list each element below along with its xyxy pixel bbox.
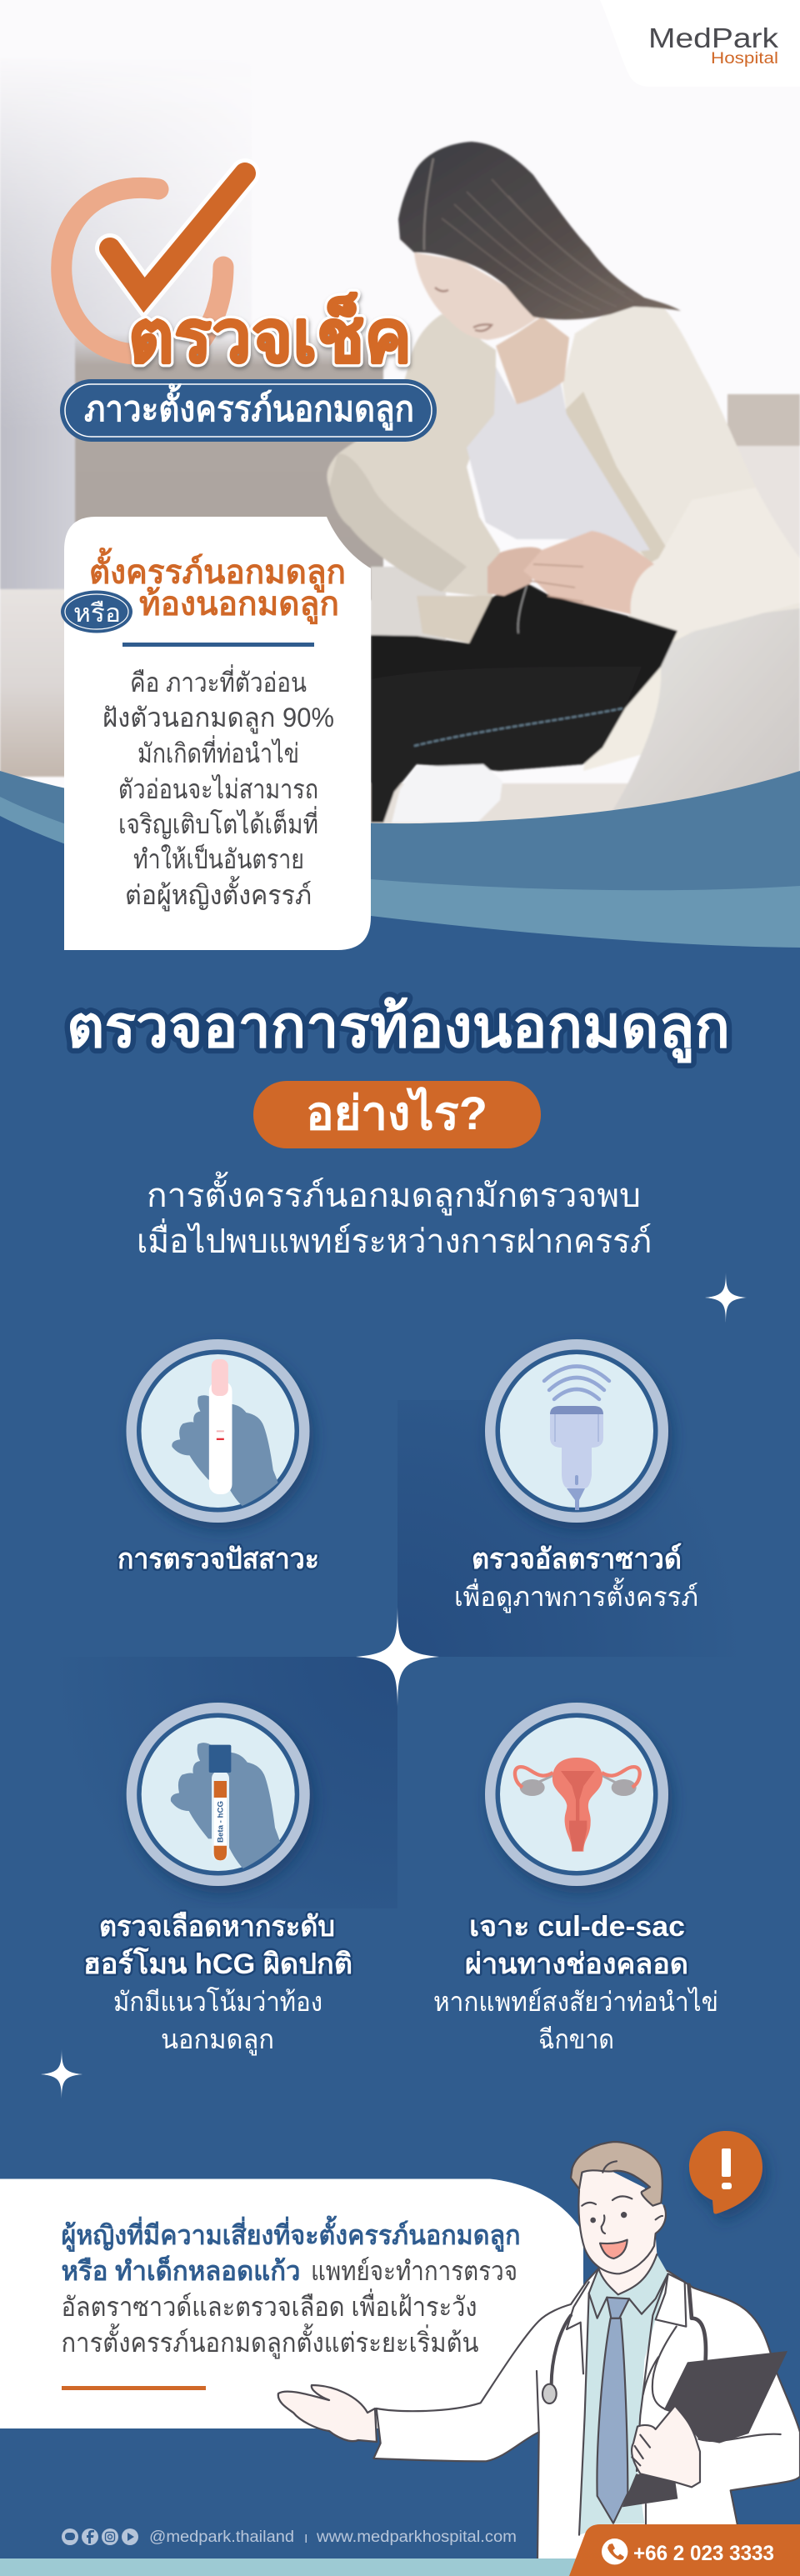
- label: [83, 1911, 352, 1980]
- risk note body: แพทย์จะทำการตรวจ: [311, 2256, 518, 2286]
- card heading line 2: ท้องนอกมดลูก: [139, 586, 339, 624]
- phone number: +66 2 023 3333: [633, 2542, 774, 2565]
- title: check: ตรวจเช็ค: [128, 292, 412, 378]
- orange rule: [62, 2386, 206, 2390]
- step: culdocentesis: [433, 1703, 718, 2054]
- risk note bold text 2: หรือ ทำเด็กหลอดแก้ว: [62, 2254, 300, 2286]
- icon: pregnancy test: [127, 1339, 310, 1523]
- wave: dark blue section background: [0, 816, 800, 2576]
- phone tab: [569, 2524, 800, 2576]
- risk note body: [62, 2256, 518, 2359]
- risk note bold text: ผู้หญิงที่มีความเสี่ยงที่จะตั้งครรภ์นอกมดลูก: [62, 2215, 520, 2253]
- sparkle top right: [705, 1273, 747, 1323]
- step: ultrasound: [454, 1339, 698, 1613]
- illustration: doctor: [278, 2142, 800, 2560]
- description: นอกมดลูก: [161, 2024, 274, 2056]
- description: เพื่อดูภาพการตั้งครรภ์: [454, 1578, 698, 1613]
- icon: check mark in ring: [62, 173, 245, 354]
- step: urine test: [118, 1339, 319, 1575]
- label: ผ่านทางช่องคลอด: [465, 1948, 688, 1980]
- intro text: การตั้งครรภ์นอกมดลูกมักตรวจพบ: [147, 1171, 641, 1215]
- card body text: ทำให้เป็นอันตราย: [133, 843, 304, 874]
- wave: light blue band: [0, 797, 800, 1083]
- description: ฉีกขาด: [538, 2024, 614, 2054]
- card body text: มักเกิดที่ท่อนำไข่: [138, 735, 299, 768]
- step: blood test: [83, 1703, 352, 2056]
- description: [433, 1987, 718, 2054]
- footer: handle: @medpark.thailand: [149, 2528, 294, 2546]
- label: เจาะ cul-de-sac: [469, 1911, 685, 1943]
- intro text: [137, 1171, 652, 1260]
- icon: blood tube: [127, 1703, 310, 1886]
- icon: alert bubble: [689, 2131, 762, 2213]
- wave: medium blue band: [0, 771, 800, 1083]
- risk note body: การตั้งครรภ์นอกมดลูกตั้งแต่ระยะเริ่มต้น: [62, 2323, 479, 2359]
- panel: risk note: [0, 2178, 583, 2428]
- title: check: ตรวจเช็ค: [128, 292, 412, 378]
- panel: definition card: [61, 517, 371, 950]
- card divider: [122, 643, 314, 647]
- footer: social icons: [62, 2528, 138, 2545]
- logo: Hospital: Hospital: [711, 50, 778, 68]
- icon: uterus: [485, 1703, 668, 1886]
- badge: or: [61, 590, 132, 633]
- footer: separator: [305, 2534, 307, 2543]
- description: หากแพทย์สงสัยว่าท่อนำไข่: [433, 1987, 718, 2017]
- card body text: ฝังตัวนอกมดลูก 90%: [102, 703, 334, 734]
- pill: how: อย่างไร?: [306, 1086, 488, 1139]
- label: ฮอร์โมน hCG ผิดปกติ: [83, 1947, 352, 1980]
- logo tab: [600, 0, 800, 87]
- risk note body: อัลตราซาวด์และตรวจเลือด เพื่อเฝ้าระวัง: [62, 2288, 477, 2322]
- heading: how to check: ตรวจอาการท้องนอกมดลูก: [67, 994, 730, 1063]
- sparkle bottom left: [41, 2049, 82, 2099]
- label: การตรวจปัสสาวะ: [118, 1543, 319, 1575]
- shadow panel: top right: [398, 1400, 748, 1657]
- icon: ultrasound probe: [485, 1339, 668, 1523]
- icon: phone: [602, 2538, 628, 2564]
- subtitle text: ภาวะตั้งครรภ์นอกมดลูก: [84, 383, 414, 431]
- intro text: เมื่อไปพบแพทย์ระหว่างการฝากครรภ์: [137, 1218, 652, 1260]
- hero photo: woman holding abdomen on sofa: [0, 0, 800, 833]
- footer stripe: [0, 2558, 577, 2576]
- label: ตรวจอัลตราซาวด์: [472, 1543, 682, 1575]
- card body text: ต่อผู้หญิงตั้งครรภ์: [125, 876, 312, 912]
- card body text: เจริญเติบโตได้เต็มที่: [118, 806, 318, 839]
- card heading line 1: ตั้งครรภ์นอกมดลูก: [89, 548, 346, 593]
- card body text: [102, 664, 334, 912]
- card body text: คือ ภาวะที่ตัวอ่อน: [130, 664, 307, 698]
- sparkle center: [356, 1607, 439, 1707]
- doctor hand: [278, 2385, 377, 2442]
- label: [465, 1911, 688, 1980]
- subtitle pill: [60, 379, 437, 442]
- logo: MedPark: MedPark: [648, 23, 779, 53]
- description: [113, 1987, 322, 2056]
- badge: or: หรือ: [73, 600, 121, 628]
- icon: blood tube: Beta - hCG: [217, 1801, 225, 1843]
- pill: how: [253, 1081, 541, 1148]
- label: ตรวจเลือดหากระดับ: [99, 1911, 335, 1943]
- card body text: ตัวอ่อนจะไม่สามารถ: [118, 774, 318, 804]
- footer: website: www.medparkhospital.com: [316, 2528, 517, 2546]
- shadow panel: bottom left: [50, 1657, 398, 1908]
- description: มักมีแนวโน้มว่าท้อง: [113, 1987, 322, 2017]
